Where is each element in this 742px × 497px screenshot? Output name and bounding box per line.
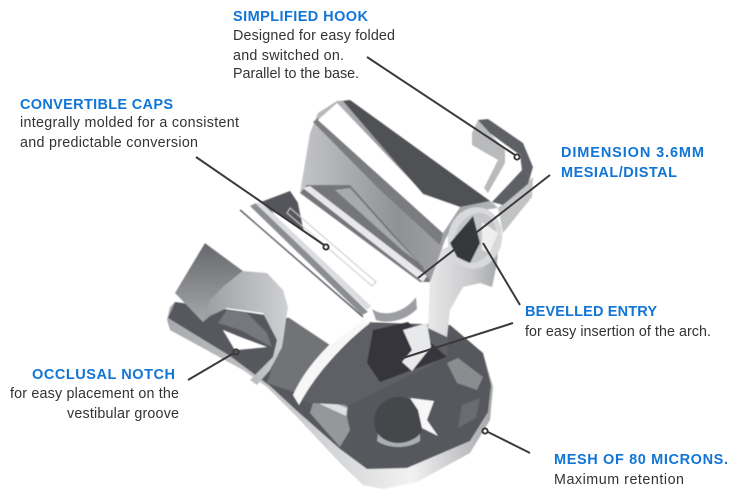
front hook crescent (203, 271, 288, 385)
dark slot line (240, 210, 363, 317)
pillar (428, 225, 500, 337)
text: bevelled entry: BEVELLED ENTRY (525, 304, 657, 320)
text: dimension (561, 145, 704, 181)
text: simplified hook (233, 9, 395, 82)
leader: bevelled lower (403, 323, 513, 358)
text: bevelled entry (525, 304, 711, 340)
cap slot lines (250, 203, 368, 315)
leader: dimension (418, 175, 550, 278)
mesh pad centre (374, 397, 424, 445)
leader lines (188, 57, 550, 453)
hook outer (478, 119, 533, 205)
leader: caps (196, 157, 324, 245)
leader end rings (233, 154, 520, 434)
text: occlusal notch: for easy placement on the (10, 386, 179, 402)
text: simplified hook: and switched on. (233, 48, 344, 64)
text: dimension: DIMENSION 3.6MM (561, 145, 704, 161)
notch white triangle (223, 330, 267, 350)
body highlight curve (293, 318, 370, 405)
rear wing dark band (343, 100, 490, 207)
text: simplified hook: SIMPLIFIED HOOK (233, 9, 369, 25)
mesh pad left (310, 392, 350, 447)
rear wing body (300, 100, 498, 282)
rear wing lower dark stripe (313, 118, 443, 245)
bracket illustration (167, 100, 533, 489)
cap rim (372, 297, 417, 322)
hook tab (472, 120, 505, 193)
leader: hook (367, 57, 515, 155)
barrel opening (441, 201, 509, 275)
slot surface (300, 185, 430, 282)
text: bevelled entry: for easy insertion of the arch. (525, 324, 711, 340)
text: convertible caps (20, 97, 239, 151)
cap dark strip overlap (262, 191, 304, 232)
leader: mesh (488, 432, 530, 453)
text: convertible caps: and predictable conversion (20, 135, 198, 151)
silver behind hook (498, 177, 533, 233)
rear wing white band (318, 103, 460, 233)
body side wall (267, 317, 363, 393)
text: convertible caps: CONVERTIBLE CAPS (20, 97, 173, 113)
leader: notch (188, 353, 234, 380)
crescent inner shade (218, 310, 272, 347)
text: mesh: MESH OF 80 MICRONS. (554, 452, 728, 468)
text: dimension: MESIAL/DISTAL (561, 165, 677, 181)
base plate dark top (168, 302, 491, 469)
text: occlusal notch: vestibular groove (67, 406, 179, 422)
front wing dark face (175, 243, 243, 322)
text: simplified hook: Designed for easy folded (233, 28, 395, 44)
front under cap window (367, 322, 447, 382)
text: convertible caps: integrally molded for a consistent (20, 115, 239, 131)
leader: bevelled upper (483, 243, 520, 305)
text: simplified hook: Parallel to the base. (233, 66, 359, 82)
base plate rim (167, 302, 493, 489)
text: occlusal notch (10, 367, 179, 422)
front cap dark strip (253, 191, 307, 237)
body dark lower (293, 323, 448, 405)
front wing white face (205, 210, 363, 345)
front cap white top (268, 203, 417, 320)
mesh pad right (447, 358, 483, 390)
text: occlusal notch: OCCLUSAL NOTCH (32, 367, 175, 383)
text: mesh: Maximum retention (554, 472, 684, 488)
text: mesh (554, 452, 728, 488)
